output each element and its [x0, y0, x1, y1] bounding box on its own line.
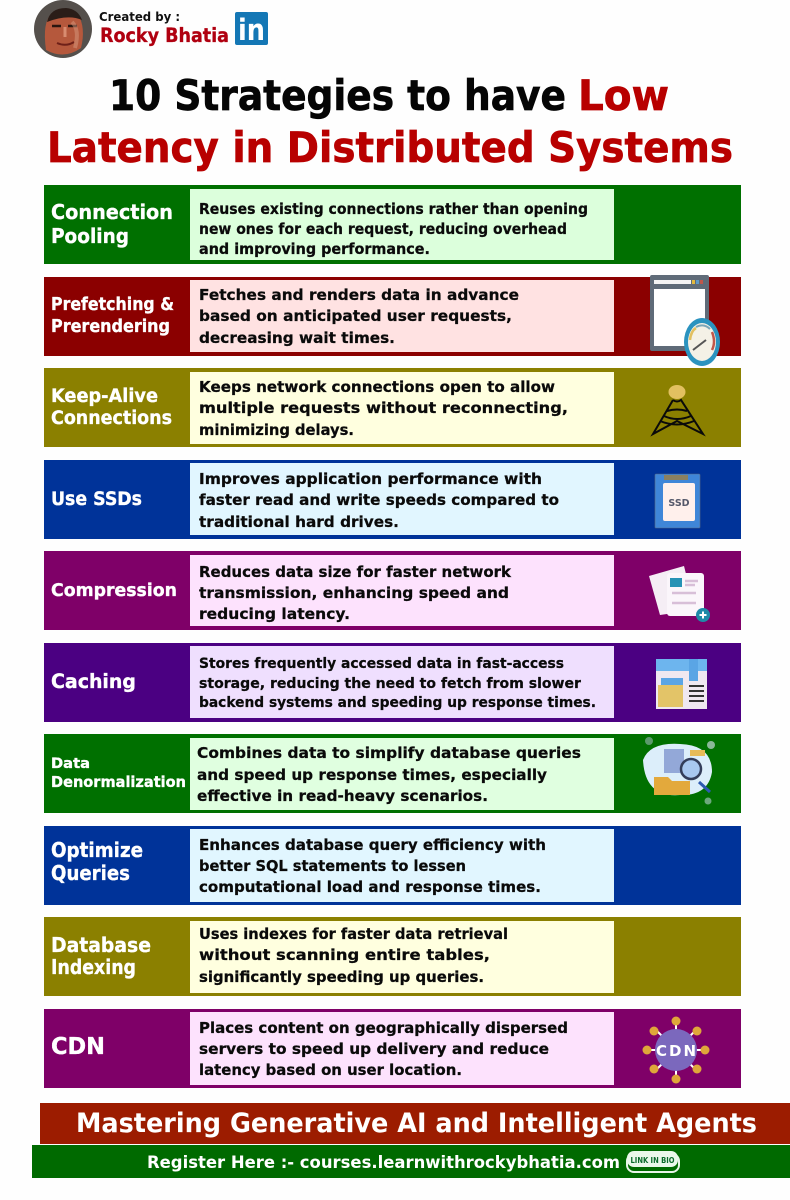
description: Reuses existing connections rather than opening — [199, 200, 588, 218]
description — [199, 378, 568, 439]
description: latency based on user location. — [199, 1061, 462, 1079]
banner: register link — [32, 1145, 790, 1178]
icon: link in bio badge: LINK IN BIO — [630, 1156, 674, 1165]
description — [199, 563, 512, 623]
description: Stores frequently accessed data in fast-access — [199, 656, 564, 672]
icon: tower — [653, 385, 703, 434]
description: new ones for each request, reducing overhead — [199, 220, 567, 238]
description: Keeps network connections open to allow — [199, 378, 555, 396]
description — [199, 836, 546, 896]
label: Keep-Alive — [51, 386, 158, 407]
description: storage, reducing the need to fetch from slower — [199, 676, 581, 692]
description: reducing latency. — [199, 605, 350, 623]
title: Low — [578, 71, 669, 120]
description: decreasing wait times. — [199, 329, 395, 347]
banner: course title: Mastering Generative AI and Intelligent Agents — [76, 1108, 757, 1139]
label — [51, 386, 172, 429]
panel: keep-alive — [44, 368, 741, 447]
description: Reduces data size for faster network — [199, 563, 512, 581]
description: Improves application performance with — [199, 470, 542, 488]
description — [199, 470, 559, 531]
description: transmission, enhancing speed and — [199, 584, 509, 602]
author name: Rocky Bhatia — [100, 24, 229, 47]
label — [51, 294, 174, 337]
panel: denormalization — [44, 734, 741, 813]
title — [47, 71, 733, 172]
icon: link in bio badge — [627, 1151, 679, 1172]
description — [199, 1019, 568, 1079]
label: Caching — [51, 670, 136, 693]
label: Prefetching & — [51, 294, 174, 315]
label: Queries — [51, 861, 130, 885]
label: Connection — [51, 200, 173, 224]
description: Combines data to simplify database queries — [197, 744, 581, 762]
label: Indexing — [51, 955, 136, 979]
description: multiple requests without reconnecting, — [199, 399, 568, 417]
description: Places content on geographically dispersed — [199, 1019, 568, 1037]
description — [199, 925, 508, 986]
label: Data — [51, 756, 90, 772]
author photo — [34, 0, 92, 58]
icon: cdn: CDN — [656, 1042, 696, 1060]
description: better SQL statements to lessen — [199, 857, 466, 875]
title: 10 Strategies to have — [109, 71, 566, 120]
created by label: Created by : — [99, 9, 180, 24]
description: computational load and response times. — [199, 878, 541, 896]
description: faster read and write speeds compared to — [199, 491, 559, 509]
banner: register link: Register Here :- courses.learnwithrockybhatia.com — [147, 1153, 620, 1173]
panel: optimize queries — [44, 826, 741, 905]
description: without scanning entire tables, — [199, 946, 490, 964]
icon: documents — [649, 566, 710, 622]
description: Fetches and renders data in advance — [199, 286, 519, 304]
description: and improving performance. — [199, 240, 430, 258]
panel: database indexing — [44, 917, 741, 996]
icon: ssd: SSD — [668, 498, 690, 509]
description: Uses indexes for faster data retrieval — [199, 925, 508, 943]
label: Denormalization — [51, 773, 186, 791]
label — [51, 200, 173, 248]
description — [199, 286, 519, 347]
icon: cdn — [642, 1016, 710, 1084]
label — [51, 756, 186, 791]
panel: caching — [44, 643, 741, 722]
label: Connections — [51, 408, 172, 429]
description: backend systems and speeding up response times. — [199, 695, 596, 711]
title: Latency in Distributed Systems — [47, 123, 733, 172]
label: Prerendering — [51, 316, 170, 337]
label — [51, 933, 151, 979]
description: significantly speeding up queries. — [199, 968, 484, 986]
description: traditional hard drives. — [199, 513, 399, 531]
label — [51, 838, 143, 885]
description — [197, 744, 581, 805]
icon: data search — [643, 737, 715, 804]
label: Use SSDs — [51, 488, 142, 510]
panel: use ssds — [44, 460, 741, 539]
icon: browser folder — [656, 659, 707, 709]
icon: browser gauge — [650, 275, 720, 366]
icon: ssd — [655, 474, 700, 528]
description — [199, 200, 588, 258]
panel: cdn — [44, 1009, 741, 1088]
panel: prefetching — [44, 275, 741, 366]
description: Enhances database query efficiency with — [199, 836, 546, 854]
panel: compression — [44, 551, 741, 630]
description: minimizing delays. — [199, 421, 354, 439]
icon: linkedin: in — [238, 13, 265, 47]
description — [199, 656, 596, 711]
description: based on anticipated user requests, — [199, 307, 512, 325]
description: servers to speed up delivery and reduce — [199, 1040, 549, 1058]
label: Compression — [51, 580, 177, 601]
label: Database — [51, 933, 151, 957]
label: Optimize — [51, 838, 143, 862]
label: CDN — [51, 1034, 105, 1060]
description: and speed up response times, especially — [197, 766, 547, 784]
label: Pooling — [51, 224, 129, 248]
description: effective in read-heavy scenarios. — [197, 787, 488, 805]
panel: connection pooling — [44, 185, 741, 264]
